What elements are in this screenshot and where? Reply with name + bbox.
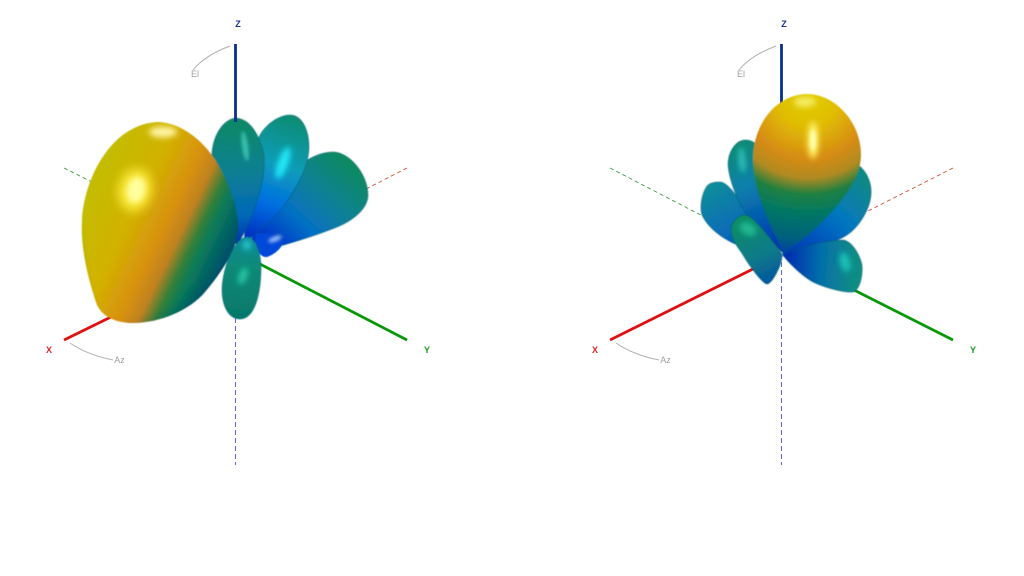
left elevation arc and label xyxy=(191,46,230,79)
right elevation arc and label xyxy=(737,46,776,79)
right Y label: Y xyxy=(970,345,976,355)
left lobe: bottom xyxy=(222,237,261,319)
right dashed negative axes xyxy=(610,168,953,465)
left elevation arc and label: El xyxy=(191,69,199,79)
right azimuth arc and label xyxy=(616,343,671,365)
right lobe: front left xyxy=(731,215,782,284)
right azimuth arc and label: Az xyxy=(660,355,671,365)
right Z label: Z xyxy=(781,19,787,29)
right lobe: far left xyxy=(701,182,750,244)
left lobe: far right xyxy=(250,152,368,246)
left Y label: Y xyxy=(424,345,430,355)
left azimuth arc and label: Az xyxy=(114,355,125,365)
left lobes group xyxy=(78,115,368,340)
left X axis xyxy=(64,315,115,340)
left lobe: main beam xyxy=(80,121,239,324)
right Z axis xyxy=(780,44,783,110)
right lobes group xyxy=(701,94,871,292)
right Y axis xyxy=(850,288,953,340)
right 3D radiation pattern panel xyxy=(592,19,976,465)
right lobe: rear right xyxy=(783,165,871,256)
left Z label: Z xyxy=(235,19,241,29)
left azimuth arc and label xyxy=(70,343,125,365)
left 3D radiation pattern panel xyxy=(46,19,430,465)
left Y axis xyxy=(256,262,407,340)
right X axis xyxy=(610,268,755,340)
left dashed negative axes xyxy=(64,168,407,465)
right X label: X xyxy=(592,345,598,355)
left lobe: top front xyxy=(212,118,264,244)
right lobe: upper left xyxy=(728,140,784,254)
right lobe: lower right xyxy=(782,240,862,292)
right lobe: main beam xyxy=(753,94,861,254)
right elevation arc and label: El xyxy=(737,69,745,79)
left Z axis xyxy=(234,44,237,122)
left lobe: small rear xyxy=(256,233,283,257)
left X label: X xyxy=(46,345,52,355)
left lobe: tall middle xyxy=(244,115,309,242)
